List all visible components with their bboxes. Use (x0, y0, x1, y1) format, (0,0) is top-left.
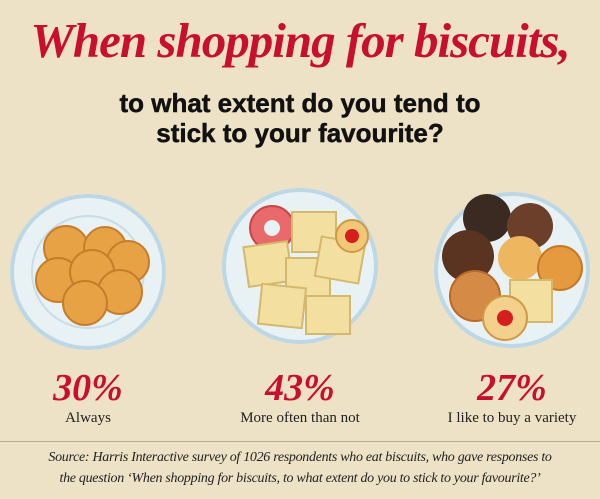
source note (48, 450, 552, 486)
label: Always: Always (65, 410, 111, 426)
subtitle (119, 88, 481, 148)
plate 1 (10, 194, 166, 350)
stat: 27%: 27% (477, 367, 547, 409)
source note: Source: Harris Interactive survey of 1026 respondents who eat biscuits, who gave responses to (48, 450, 552, 465)
plate 3 (434, 192, 590, 348)
subtitle: stick to your favourite? (156, 118, 444, 148)
stat: 43%: 43% (265, 367, 335, 409)
plate 2 (222, 188, 378, 344)
subtitle: to what extent do you tend to (119, 88, 481, 118)
label: more often: More often than not (240, 410, 360, 426)
label: variety: I like to buy a variety (448, 410, 576, 426)
title: When shopping for biscuits, (30, 13, 570, 68)
source note: the question ‘When shopping for biscuits, to what extent do you to stick to your favourite?’ (60, 471, 540, 486)
stat: 30%: 30% (53, 367, 123, 409)
